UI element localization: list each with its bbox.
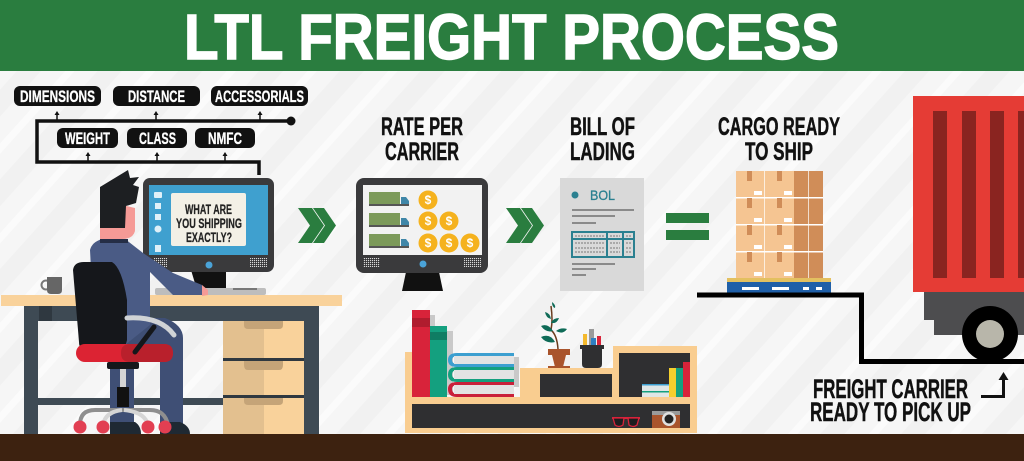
pill: class: CLASS xyxy=(139,130,176,148)
arrow: chevrons one xyxy=(298,208,336,243)
torso and arm xyxy=(90,239,202,345)
dialog text: EXACTLY? xyxy=(186,230,232,245)
heading: rate per carrier xyxy=(381,113,463,166)
label: freight carrier ready to pick up xyxy=(810,374,971,427)
camera xyxy=(652,411,680,428)
loading dock line xyxy=(697,295,1024,362)
dialog text xyxy=(176,202,242,245)
pill: weight xyxy=(57,128,118,148)
pill: accessorials xyxy=(211,86,308,106)
document: bill of lading xyxy=(560,178,644,291)
document: bill of lading: BOL xyxy=(590,187,615,203)
table xyxy=(572,232,634,257)
drawers xyxy=(223,321,304,434)
pill: dimensions: DIMENSIONS xyxy=(20,88,95,106)
sidebar icons xyxy=(154,192,162,252)
truck xyxy=(913,96,1024,362)
monitor: rates xyxy=(356,178,488,291)
floor xyxy=(0,434,1024,461)
dialog text: WHAT ARE xyxy=(185,202,232,217)
pill: distance: DISTANCE xyxy=(128,88,185,106)
arrow: pick up xyxy=(981,372,1008,396)
legs xyxy=(110,318,183,430)
shipment attributes tree xyxy=(14,86,308,175)
collar xyxy=(100,239,128,243)
dialog text: YOU SHIPPING xyxy=(176,216,242,231)
monitor: rates: $ xyxy=(467,236,474,250)
equals sign xyxy=(666,213,709,240)
wheel xyxy=(962,306,1018,362)
monitor: rates: $ xyxy=(446,214,453,228)
monitor: rates: $ xyxy=(425,214,432,228)
stacked books xyxy=(448,353,519,397)
pill: dimensions xyxy=(14,86,101,106)
icon: mug xyxy=(42,277,62,294)
heading: cargo ready to ship xyxy=(718,113,840,166)
person at desk xyxy=(90,170,208,434)
pill: nmfc xyxy=(195,128,255,148)
pill: distance xyxy=(113,86,200,106)
shoes xyxy=(110,422,190,434)
upright books xyxy=(412,310,453,397)
keyboard xyxy=(155,288,266,295)
pill: accessorials: ACCESSORIALS xyxy=(215,88,304,106)
title banner: LTL FREIGHT PROCESS xyxy=(184,1,839,73)
pill: weight: WEIGHT xyxy=(65,130,110,148)
cargo pallet xyxy=(727,171,831,293)
pill: class xyxy=(127,128,187,148)
heading: cargo ready to ship: TO SHIP xyxy=(745,138,813,166)
pen cup xyxy=(580,329,604,368)
small books xyxy=(642,362,690,397)
heading: rate per carrier: CARRIER xyxy=(385,138,459,166)
sunglasses xyxy=(612,418,640,426)
hair xyxy=(100,170,139,228)
monitor: what are you shipping xyxy=(143,178,274,290)
arrow: chevrons two xyxy=(506,208,544,243)
bookshelf xyxy=(405,302,697,433)
monitor: rates: $ xyxy=(425,193,432,207)
office chair xyxy=(73,262,174,434)
monitor: rates: $ xyxy=(446,236,453,250)
pill: nmfc: NMFC xyxy=(208,130,242,148)
coins xyxy=(418,190,480,252)
heading: bill of lading: BILL OF xyxy=(570,113,635,141)
plant xyxy=(541,302,570,368)
heading: bill of lading: LADING xyxy=(570,138,635,166)
neck and hand xyxy=(100,205,208,296)
heading: cargo ready to ship: CARGO READY xyxy=(718,113,840,141)
heading: rate per carrier: RATE PER xyxy=(381,113,463,141)
heading: bill of lading xyxy=(570,113,635,166)
monitor: rates: $ xyxy=(425,236,432,250)
desk xyxy=(1,295,342,434)
truck rows xyxy=(369,192,400,246)
